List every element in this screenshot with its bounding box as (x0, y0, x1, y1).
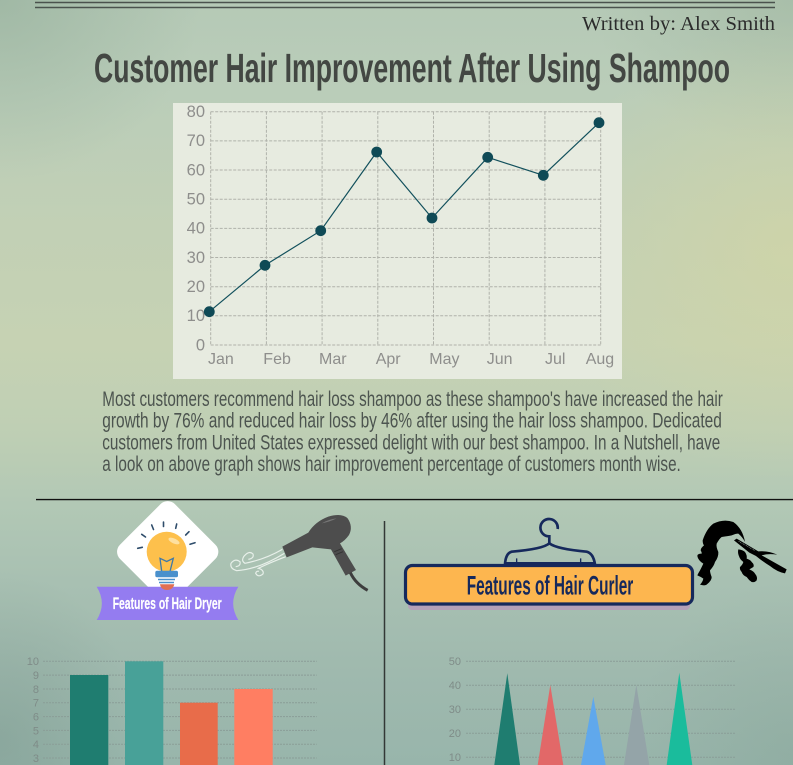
bar chart: hair dryer features (27, 656, 317, 765)
icon: hair dryer (231, 515, 368, 590)
y axis labels: 30 (187, 249, 205, 267)
y axis labels: 50 (187, 190, 205, 208)
x axis labels: Aug (586, 351, 614, 368)
banner: features of hair curler (406, 566, 692, 610)
spike chart axis labels: 10 (449, 752, 461, 764)
y axis labels (187, 103, 205, 354)
y axis labels: 60 (187, 161, 205, 179)
x axis labels: Jan (208, 351, 234, 368)
description paragraph (102, 388, 723, 476)
icon: light bulb (138, 522, 195, 590)
y axis labels: 80 (187, 103, 205, 121)
y axis labels: 0 (196, 336, 205, 354)
bar chart axis labels: 4 (33, 739, 39, 751)
bar chart axis labels: 3 (33, 753, 39, 765)
bar chart axis labels: 9 (33, 670, 39, 682)
spike chart axis labels: 40 (449, 680, 461, 692)
y axis labels: 10 (187, 307, 205, 325)
x axis labels (208, 351, 614, 368)
bar chart axis labels: 8 (33, 684, 39, 696)
bar chart axis labels: 10 (27, 656, 39, 668)
data line (204, 117, 604, 317)
icon: white diamond behind bulb (113, 497, 223, 607)
bar chart axis labels: 7 (33, 698, 39, 710)
banner: features of hair curler: Features of Hair Curler (467, 570, 634, 600)
ribbon: features of hair dryer: Features of Hair Dryer (113, 594, 222, 613)
spike chart axis labels: 30 (449, 704, 461, 716)
x axis labels: May (429, 351, 460, 368)
y axis labels: 20 (187, 278, 205, 296)
bar chart axis labels: 5 (33, 725, 39, 737)
x axis labels: Mar (319, 351, 347, 368)
bar chart axis labels (27, 656, 39, 765)
y axis labels: 70 (187, 132, 205, 150)
icon: clothes hanger (505, 519, 595, 568)
bars (70, 661, 273, 765)
bar chart axis labels: 6 (33, 712, 39, 724)
spike chart axis labels: 50 (449, 656, 461, 668)
spike chart axis labels: 20 (449, 728, 461, 740)
x axis labels: Jun (487, 351, 512, 368)
author credit: Written by: Alex Smith (582, 14, 775, 35)
x axis labels: Apr (376, 351, 401, 368)
y axis labels: 40 (187, 220, 205, 238)
x axis labels: Feb (263, 351, 291, 368)
icon: hair silhouette with curling iron (697, 521, 787, 585)
x axis labels: Jul (545, 351, 565, 368)
spike chart axis labels (449, 656, 461, 764)
ribbon: features of hair dryer (97, 587, 238, 620)
panel: line chart of hair improvement (173, 103, 622, 379)
spikes (494, 673, 692, 765)
spike chart: hair curler features (449, 656, 735, 765)
